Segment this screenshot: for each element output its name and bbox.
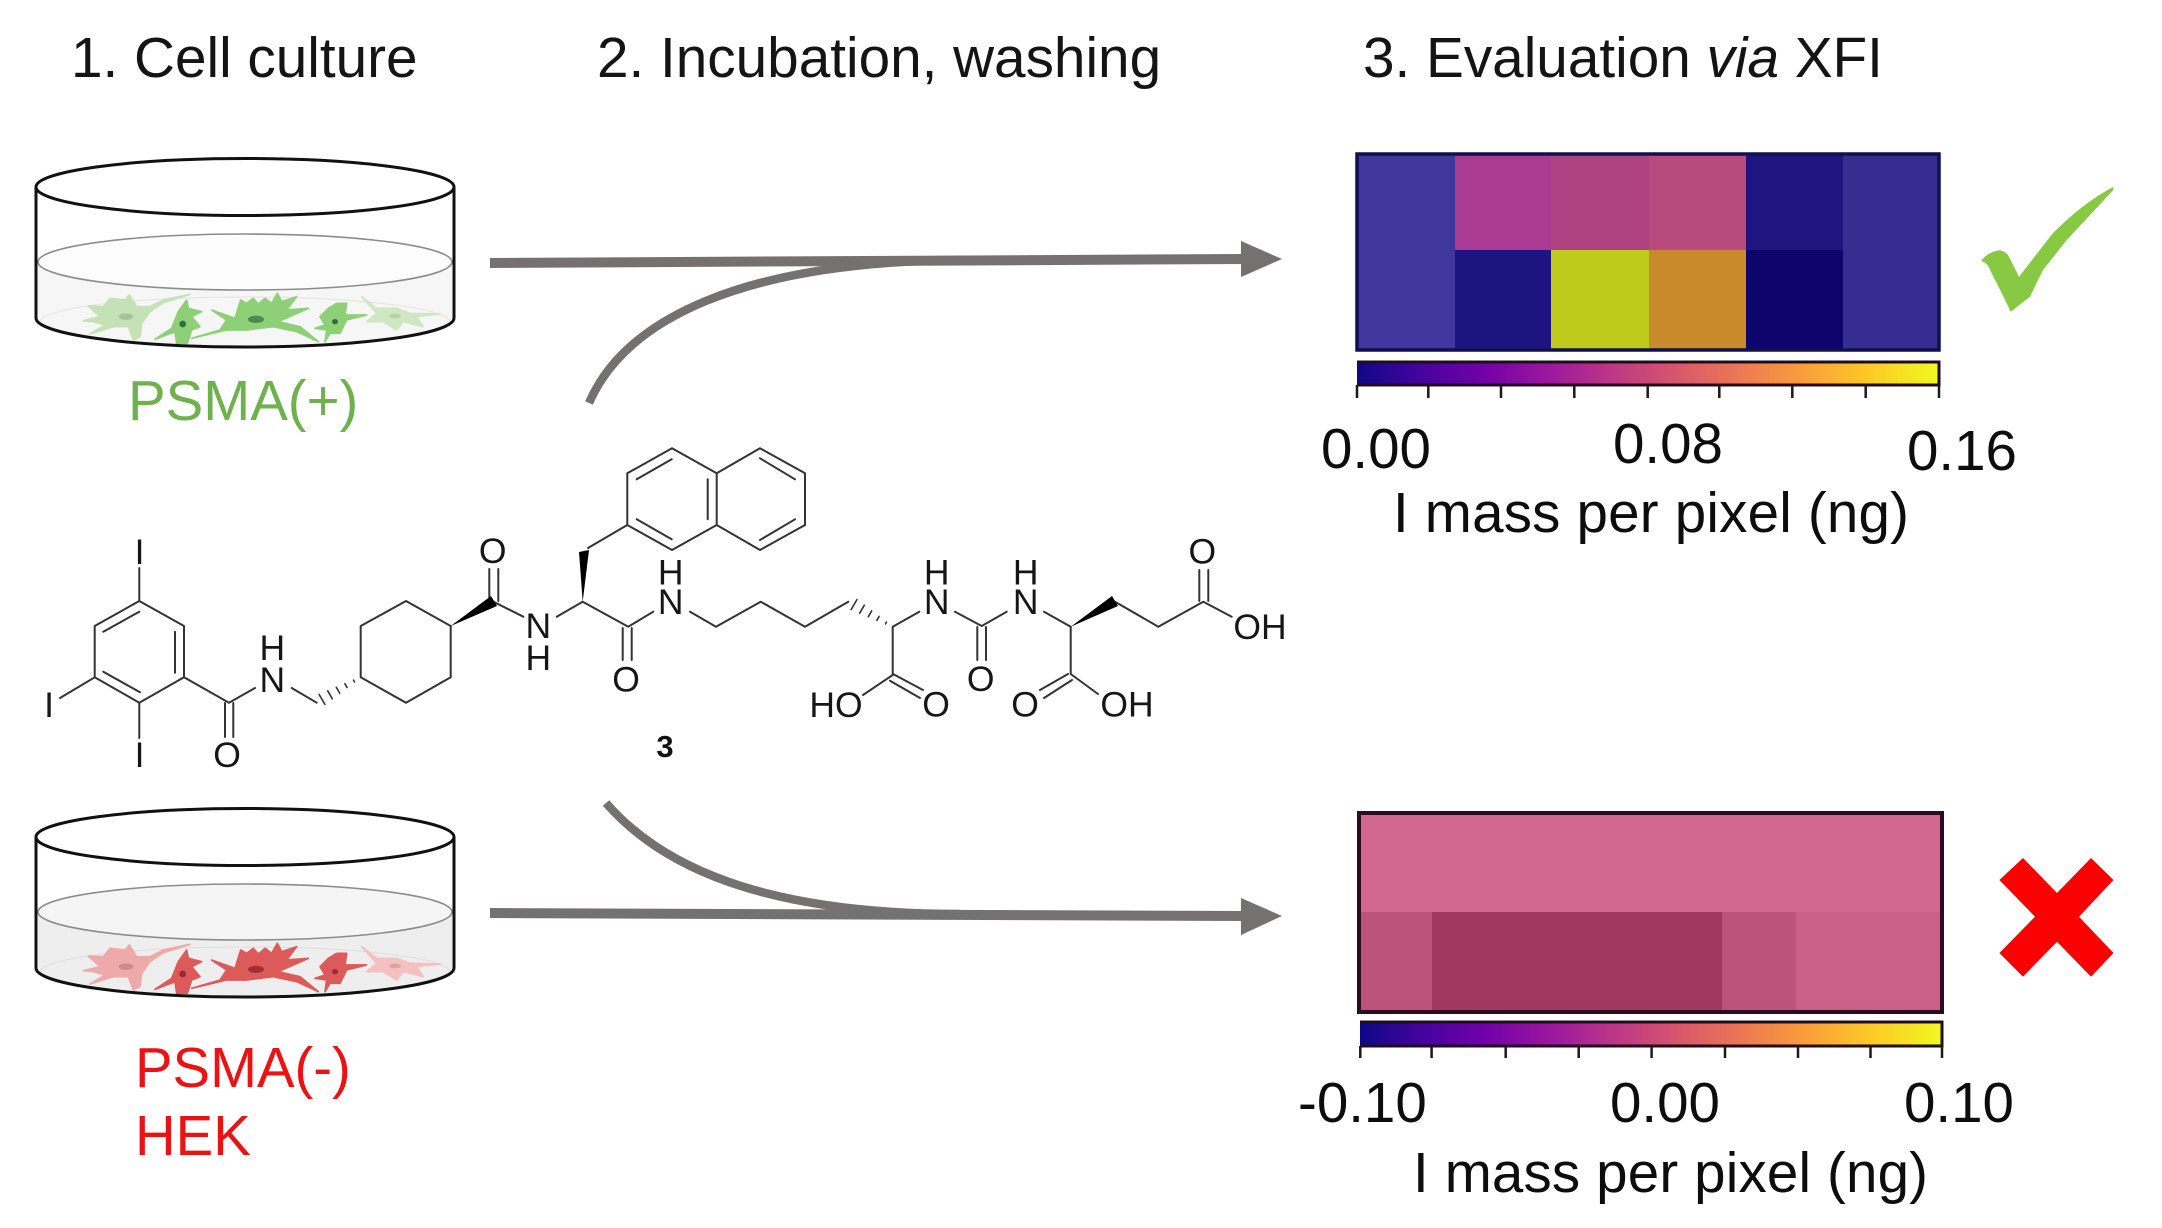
heading: step 3: 3. Evaluation via XFI	[1363, 27, 1883, 90]
label: PSMA(-) HEK	[135, 1036, 351, 1167]
heading: step 2: 2. Incubation, washing	[597, 27, 1161, 90]
colorbar: PSMA negative	[1360, 1022, 1942, 1058]
atom labels: I	[135, 735, 144, 775]
axis labels: PSMA positive: I mass per pixel (ng)	[1393, 481, 1909, 544]
heading: step 1: 1. Cell culture	[71, 27, 418, 90]
arrow: bottom dish to bottom heatmap	[490, 803, 1282, 935]
axis labels: PSMA positive: 0.00	[1321, 417, 1431, 480]
compound number: 3	[656, 729, 674, 764]
chemical structure: compound 3	[44, 448, 1287, 775]
atom labels: H	[658, 552, 684, 592]
heatmap: PSMA positive	[1357, 153, 1940, 350]
axis labels: PSMA positive	[1321, 412, 2017, 544]
label: PSMA(-) HEK: HEK	[135, 1104, 251, 1167]
atom labels: N	[924, 582, 950, 622]
axis labels: PSMA negative: 0.10	[1904, 1071, 2014, 1134]
atom labels: O	[1011, 684, 1039, 724]
atom labels: I	[135, 532, 144, 572]
atom labels: H	[259, 628, 285, 668]
atom labels: I	[44, 685, 54, 725]
icon: green check mark	[1981, 187, 2113, 312]
atom labels: N	[658, 582, 684, 622]
atom labels	[44, 531, 1287, 775]
heatmap: PSMA negative	[1359, 812, 1942, 1012]
bonds	[60, 448, 1232, 738]
atom labels: O	[612, 660, 640, 700]
atom labels: O	[1188, 532, 1216, 572]
axis labels: PSMA negative	[1298, 1071, 2014, 1204]
axis labels: PSMA negative: -0.10	[1298, 1071, 1427, 1134]
petri dish: PSMA negative cells	[36, 808, 454, 997]
atom labels: H	[924, 552, 950, 592]
label: PSMA(-) HEK: PSMA(-)	[135, 1036, 351, 1099]
atom labels: N	[259, 660, 285, 700]
axis labels: PSMA negative: I mass per pixel (ng)	[1413, 1141, 1928, 1204]
atom labels: N	[1013, 582, 1039, 622]
atom labels: HO	[809, 685, 863, 725]
atom labels: H	[1013, 552, 1039, 592]
axis labels: PSMA negative: 0.00	[1610, 1071, 1720, 1134]
axis labels: PSMA positive: 0.08	[1613, 412, 1723, 475]
atom labels: O	[213, 735, 241, 775]
stereo wedges	[451, 550, 1118, 627]
atom labels: O	[479, 531, 507, 571]
axis labels: PSMA positive: 0.16	[1907, 419, 2017, 482]
petri dish: PSMA positive cells	[36, 158, 454, 347]
atom labels: O	[967, 659, 995, 699]
colorbar: PSMA positive	[1357, 362, 1939, 398]
atom labels: O	[922, 684, 950, 724]
arrow: top dish to top heatmap	[490, 241, 1282, 403]
atom labels: H	[525, 638, 551, 678]
atom labels: N	[525, 606, 551, 646]
atom labels: OH	[1233, 607, 1287, 647]
icon: red cross	[1999, 858, 2114, 977]
label: PSMA(+): PSMA(+)	[128, 369, 358, 432]
atom labels: OH	[1100, 685, 1154, 725]
